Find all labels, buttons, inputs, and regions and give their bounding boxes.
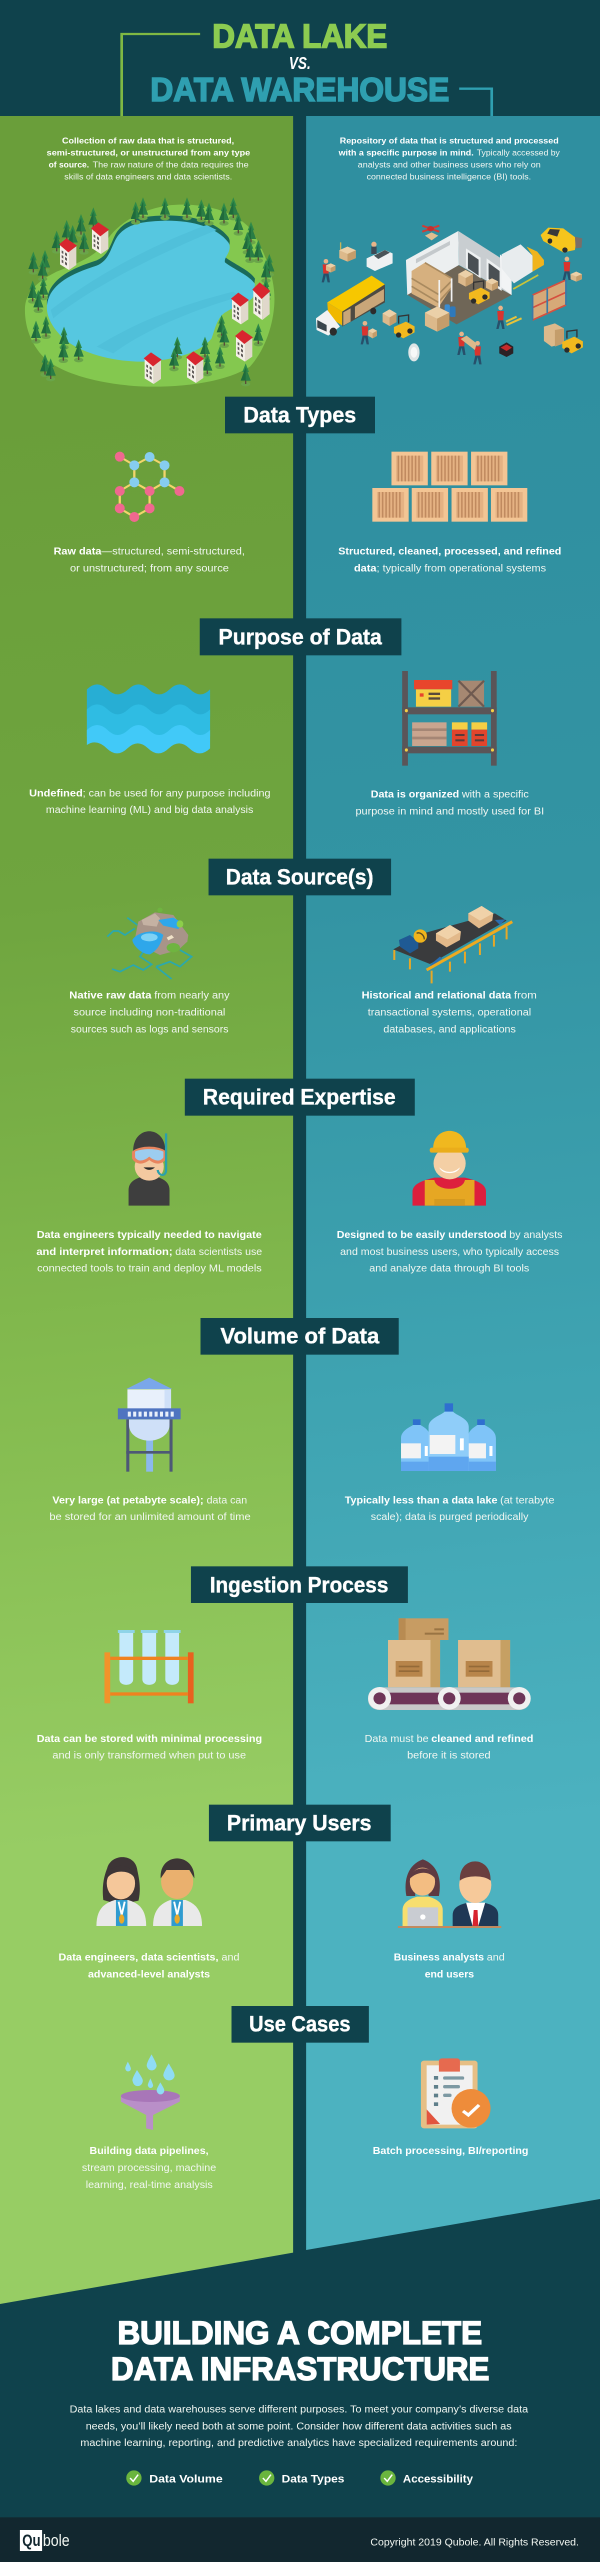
icon: clipboard with check badge [421,2058,491,2128]
text: warehouse data types: ; typically from operational systems [377,563,546,574]
title: VS. [289,53,311,73]
logo: Qubole [20,2530,70,2551]
title [122,18,492,116]
text: lake expertise [36,1230,262,1274]
text: lake expertise: connected tools to train and deploy ML models [37,1263,262,1274]
text: warehouse volume [345,1495,554,1523]
panel: data warehouse column [306,116,600,2250]
icon: water bottles [401,1403,496,1471]
text: warehouse expertise: by analysts [509,1230,563,1241]
text: warehouse ingestion [365,1734,534,1761]
text: lake data types: Raw data [54,546,102,557]
icon: island with water streams [107,908,192,979]
text: warehouse primary users: end users [425,1969,474,1980]
icon: construction worker [412,1131,486,1206]
closing heading: BUILDING A COMPLETE [117,2316,482,2351]
icon: water waves [87,684,210,753]
icon: test tubes in rack [104,1630,194,1703]
icon: funnel with drops [121,2054,180,2130]
closing paragraph [70,2404,529,2449]
logo: Qubole: Qu [22,2531,41,2550]
checklist item: Data Volume [126,2470,223,2486]
text: data warehouse definition: Typically accessed by [477,148,560,158]
text: warehouse data source [362,990,537,1035]
text: lake use cases: Building data pipelines, [90,2146,209,2157]
heading: Data Types: Data Types [243,404,356,428]
heading: Data Source(s) [209,859,391,895]
text: warehouse purpose [355,789,544,817]
section: Required Expertise [36,1079,563,1274]
text: warehouse purpose: purpose in mind and mostly used for BI [355,806,544,817]
text: lake use cases: stream processing, machine [82,2163,216,2174]
text: lake data types: or unstructured; from any source [70,563,229,574]
section: Data Source(s) [69,859,537,1035]
text: lake data types: —structured, semi-structured, [101,546,245,557]
checklist item: Data Volume: Data Volume [149,2472,223,2485]
illustration: warehouse and logistics scene [316,226,583,364]
checklist item: Accessibility [380,2470,473,2486]
closing paragraph: needs, you’ll likely need both at some point. Consider how different data activities such as [86,2421,512,2432]
text: warehouse use cases: Batch processing, BI/reporting [373,2146,529,2157]
text: warehouse data types: data [354,563,377,574]
section: Data Types [54,397,562,574]
text: data warehouse definition: with a specific purpose in mind. [338,148,474,158]
text: lake use cases: learning, real-time analysis [86,2180,213,2191]
text: lake data source: sources such as logs and sensors [71,1024,229,1035]
text: warehouse data source: databases, and applications [383,1024,516,1035]
section: Purpose of Data [29,618,544,817]
text: warehouse data types [338,546,562,574]
text: warehouse ingestion: before it is stored [407,1750,491,1761]
text: lake purpose: machine learning (ML) and big data analysis [46,805,254,816]
copyright: Copyright 2019 Qubole. All Rights Reserved. [370,2537,579,2548]
text: data lake definition: semi-structured, or unstructured from any type [47,148,250,158]
icon: storage shelf [402,671,497,766]
text: data warehouse definition: Repository of data that is structured and processed [340,136,559,146]
text: lake volume: Very large (at petabyte scale); [52,1495,204,1506]
text: warehouse primary users [394,1952,505,1980]
checklist item: Data Types [259,2470,345,2486]
text: lake purpose: ; can be used for any purpose including [83,788,271,799]
section: Ingestion Process [37,1566,534,1761]
closing heading [111,2316,489,2387]
text: warehouse data types: Structured, cleaned, processed, and refined [338,546,562,557]
section: Volume of Data [49,1318,554,1523]
text: warehouse expertise: Designed to be easily understood [337,1230,507,1241]
icon: analyst and business user [398,1859,501,1928]
footer bar [0,2517,600,2562]
heading: Required Expertise: Required Expertise [203,1086,396,1110]
text: lake data source: Native raw data [69,990,152,1001]
heading: Data Types [225,397,375,433]
text: warehouse primary users: Business analysts [394,1952,484,1963]
text: warehouse data source: Historical and relational data [362,990,512,1001]
icon: conveyor belt [393,906,512,983]
icon: boxes on conveyor [368,1618,531,1710]
section: building a complete data infrastructure [0,2316,600,2562]
text: lake ingestion: Data can be stored with minimal processing [37,1734,262,1745]
text: data warehouse definition: analysts and other business users who rely on [358,160,541,170]
text: lake expertise: data scientists use [175,1247,262,1258]
text: lake data source [69,990,230,1035]
heading: Use Cases: Use Cases [249,2013,351,2037]
text: data lake definition [47,136,250,182]
text: warehouse expertise [337,1230,563,1274]
text: warehouse volume: scale); data is purged periodically [371,1512,529,1523]
heading: Volume of Data [201,1318,399,1355]
heading: Ingestion Process: Ingestion Process [210,1574,388,1598]
closing heading: DATA INFRASTRUCTURE [111,2352,489,2387]
closing paragraph: machine learning, reporting, and predictive analytics have specialized requirements around: [80,2438,517,2449]
checklist item: Data Types: Data Types [282,2472,345,2485]
text: lake primary users [59,1952,240,1980]
text: lake purpose [29,788,271,816]
text: warehouse data source: transactional systems, operational [368,1007,531,1018]
text: lake data types [54,546,245,574]
heading: Primary Users: Primary Users [227,1812,372,1836]
text: lake volume: be stored for an unlimited amount of time [49,1512,251,1523]
heading: Purpose of Data: Purpose of Data [218,626,383,650]
text: data lake definition: skills of data engineers and data scientists. [64,172,232,182]
text: data warehouse definition [338,136,560,182]
icon: water tower [118,1378,181,1472]
heading: Volume of Data: Volume of Data [220,1325,380,1349]
icon: stacked crates [372,452,527,522]
text: lake primary users: Data engineers, data scientists, [59,1952,218,1963]
text: lake expertise: and interpret information; [36,1247,173,1258]
text: lake data source: from nearly any [154,990,230,1001]
title: DATA WAREHOUSE [150,71,449,108]
text: warehouse volume: (at terabyte [500,1495,554,1506]
heading: Ingestion Process [191,1566,408,1603]
text: lake ingestion: and is only transformed when put to use [52,1750,246,1761]
heading: Data Source(s): Data Source(s) [226,866,373,890]
panel: data lake column [0,116,293,2304]
text: lake volume: data can [207,1495,247,1506]
text: warehouse purpose: Data is organized [371,789,459,800]
section: Use Cases [82,2006,529,2191]
checklist item: Accessibility: Accessibility [403,2472,473,2485]
text: data lake definition: of source. [49,160,89,170]
text: warehouse expertise: and analyze data through BI tools [369,1263,530,1274]
text: data warehouse definition: connected business intelligence (BI) tools. [367,172,531,182]
closing paragraph: Data lakes and data warehouses serve different purposes. To meet your company’s diverse data [70,2404,529,2415]
text: lake ingestion [37,1734,262,1761]
icon: diver [129,1131,170,1206]
text: lake purpose: Undefined [29,788,83,799]
heading: Purpose of Data [200,618,401,655]
text: lake volume [49,1495,251,1523]
text: warehouse purpose: with a specific [461,789,529,800]
text: warehouse expertise: and most business users, who typically access [340,1247,559,1258]
text: warehouse data source: from [514,990,537,1001]
heading: Use Cases [232,2006,369,2043]
text: lake expertise: Data engineers typically needed to navigate [37,1230,262,1241]
text: lake primary users: and [222,1952,240,1963]
section: Primary Users [59,1805,505,1980]
text: lake data source: source including non-traditional [73,1007,225,1018]
text: warehouse volume: Typically less than a data lake [345,1495,497,1506]
icon: two scientists [96,1857,202,1926]
icon: molecule [115,452,184,522]
text: data lake definition: Collection of raw data that is structured, [62,136,234,146]
text: warehouse primary users: and [487,1952,505,1963]
text: lake primary users: advanced-level analysts [88,1969,210,1980]
heading: Required Expertise [185,1079,415,1116]
text: warehouse ingestion: Data must be [365,1734,429,1745]
text: data lake definition: The raw nature of the data requires the [93,160,249,170]
illustration: lake with trees and buildings [25,197,274,387]
text: lake use cases [82,2146,216,2191]
logo: Qubole: bole [43,2531,70,2550]
heading: Primary Users [209,1805,391,1841]
title: DATA LAKE [212,18,387,55]
text: warehouse ingestion: cleaned and refined [431,1734,534,1745]
